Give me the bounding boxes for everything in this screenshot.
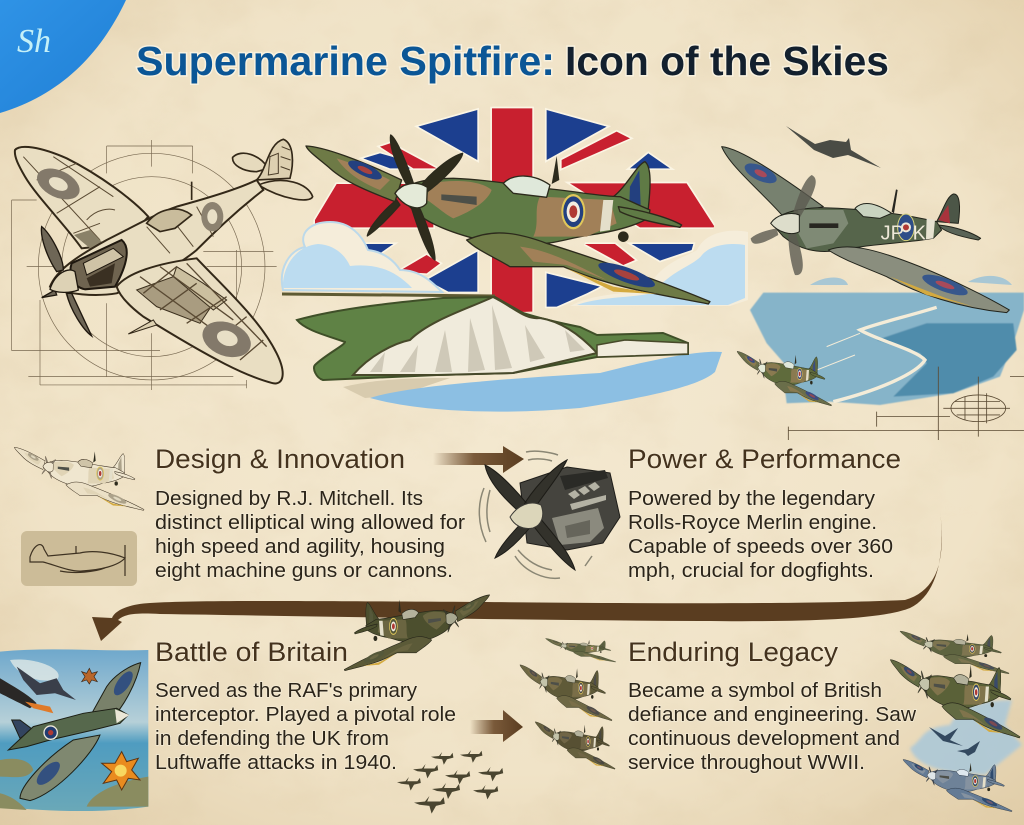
- section: battle of britain: Served as the RAF's primary: [155, 679, 418, 702]
- red flag sections: [315, 108, 715, 313]
- main spitfire: [306, 135, 710, 304]
- blueprint marks lower right: [788, 367, 1024, 440]
- enemy aircraft: [17, 667, 76, 700]
- blurred propeller: [751, 175, 816, 275]
- merlin engine with propeller: [479, 451, 620, 578]
- left clouds: [282, 222, 442, 292]
- section: design and innovation: distinct elliptical wing allowed for: [155, 511, 465, 534]
- section: enduring legacy: Enduring Legacy: [628, 637, 839, 667]
- upper wing roundel: [32, 162, 85, 206]
- title: Icon of the Skies: [565, 38, 889, 84]
- propeller: [41, 227, 92, 336]
- right sea with coastline: [750, 293, 1024, 405]
- section: design and innovation: Design & Innovation: [155, 444, 405, 474]
- signature: Sh: [17, 23, 51, 60]
- lower wing roundel: [197, 315, 256, 364]
- gun barrel: [128, 320, 157, 334]
- section: enduring legacy: defiance and engineering. Saw: [628, 703, 916, 726]
- legacy formation right: [890, 631, 1020, 812]
- engine bay: [70, 240, 127, 289]
- jp-k spitfire: [722, 147, 1009, 313]
- aerial: [189, 182, 194, 200]
- horizon line: [282, 294, 495, 296]
- design sketch icon: [14, 447, 144, 510]
- section: design and innovation: [155, 444, 465, 582]
- tailplane: [233, 153, 313, 200]
- legacy formation left: [520, 638, 616, 769]
- section: enduring legacy: continuous development and: [628, 727, 900, 750]
- section: enduring legacy: [628, 637, 916, 774]
- fighter wing up: [90, 663, 141, 717]
- section: design and innovation: eight machine guns or cannons.: [155, 559, 453, 582]
- fighter fin: [12, 720, 33, 738]
- blueprint construction lines: [12, 140, 277, 390]
- small explosion: [82, 668, 97, 684]
- upper wing: [722, 147, 823, 217]
- upper wing: [15, 147, 148, 248]
- distant spitfire top right: [786, 126, 881, 168]
- olive spitfire over battle heading: [344, 595, 490, 671]
- section: power and performance: Capable of speeds over 360: [628, 535, 893, 558]
- distant clouds: [810, 276, 1012, 285]
- cockpit canopy: [147, 209, 192, 232]
- union jack flag emblem: [315, 108, 715, 313]
- white cliffs: [353, 297, 597, 375]
- section: power and performance: Rolls-Royce Merlin engine.: [628, 511, 877, 534]
- section: enduring legacy: service throughout WWII.: [628, 751, 865, 774]
- right clouds: [570, 231, 748, 306]
- arrow: design to power: [433, 446, 524, 473]
- section: power and performance: Power & Performance: [628, 444, 901, 474]
- smoke trail: [0, 678, 37, 708]
- title: [136, 38, 889, 84]
- fuselage: [50, 180, 263, 295]
- side-view outline: [30, 545, 125, 576]
- section: power and performance: Powered by the legendary: [628, 487, 876, 510]
- fuselage: [772, 208, 942, 252]
- long connector arrow: [92, 510, 942, 641]
- spinner: [771, 214, 799, 234]
- fighter fuselage: [8, 708, 128, 750]
- section: battle of britain: Battle of Britain: [155, 637, 348, 667]
- small spitfire over the sea: [737, 351, 832, 406]
- tiny distant planes: [929, 727, 980, 756]
- motion lines: [479, 451, 592, 578]
- section: design and innovation: high speed and agility, housing: [155, 535, 445, 558]
- arrow: battle to legacy: [470, 710, 523, 742]
- title: Supermarine Spitfire:: [136, 38, 555, 84]
- blue flag sections: [360, 110, 693, 307]
- corner badge: [0, 0, 126, 113]
- fighter wing down: [20, 735, 100, 801]
- tail fin: [257, 139, 292, 180]
- fin and tailplane: [937, 194, 960, 223]
- enemy bomber formation: [397, 750, 503, 814]
- section: battle of britain: Luftwaffe attacks in 1940.: [155, 751, 397, 774]
- blueprint spitfire illustration: [12, 139, 313, 390]
- sea below cliffs: [370, 352, 722, 412]
- section: enduring legacy: Became a symbol of British: [628, 679, 882, 702]
- section: power and performance: [628, 444, 901, 582]
- section: battle of britain: interceptor. Played a pivotal role: [155, 703, 456, 726]
- lower wing: [828, 247, 1009, 313]
- section: power and performance: mph, crucial for dogfights.: [628, 559, 874, 582]
- spinner: [50, 270, 78, 292]
- propeller blades: [485, 460, 575, 570]
- wing internal structure: [137, 277, 213, 323]
- jp-k spitfire: K: [913, 222, 927, 244]
- section: battle of britain: [155, 637, 456, 774]
- spinner: [510, 503, 543, 528]
- side-view icon panel: [21, 531, 137, 586]
- green downland: [297, 297, 688, 380]
- sand strip: [343, 378, 450, 398]
- blue watercolor cloud: [910, 700, 1022, 775]
- section: design and innovation: Designed by R.J. Mitchell. Its: [155, 487, 423, 510]
- large explosion: [102, 752, 140, 790]
- fuselage roundel: [201, 202, 223, 231]
- fuselage code letters: JP: [881, 222, 904, 244]
- engine block: [520, 467, 620, 550]
- section: battle of britain: in defending the UK from: [155, 727, 389, 750]
- battle scene illustration: [0, 649, 148, 811]
- lower wing: [117, 258, 283, 383]
